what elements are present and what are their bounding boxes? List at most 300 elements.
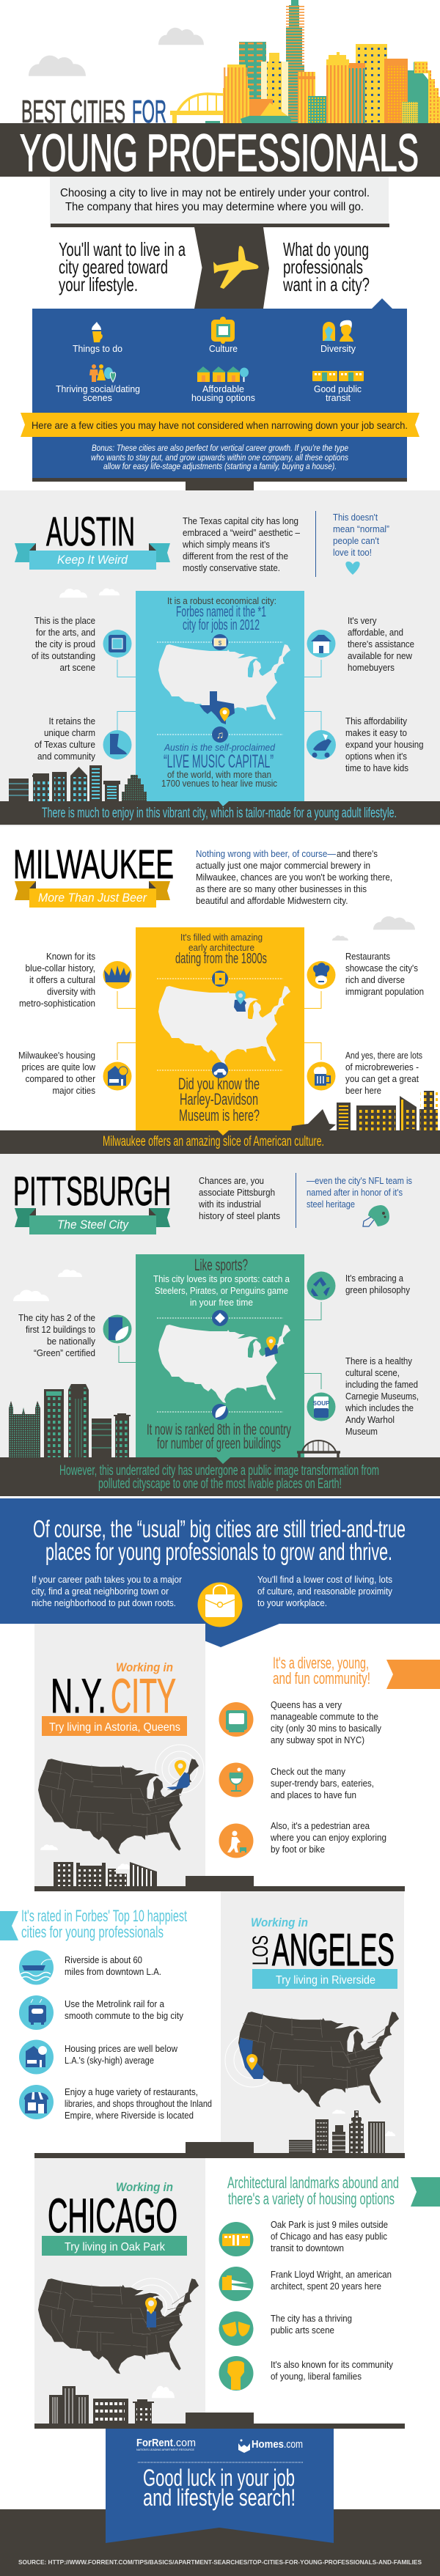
text: pittsburgh intro: associate Pittsburgh [199,1188,275,1198]
left item: housing prices [18,1050,132,1096]
center panel: pittsburgh facts [136,1254,304,1457]
text: what do young professionals want: What do young [283,238,369,260]
icon: subway [219,1702,254,1737]
connectors [117,660,321,731]
panel: milwaukee [0,841,440,2576]
center panel: milwaukee facts: It's filled with amazing [180,932,263,943]
la item: housing [19,2039,178,2075]
base bar: chicago [34,2413,405,2429]
right item: kids: time to have kids [345,763,408,773]
right item: microbreweries: And yes, there are lots [345,1050,422,1061]
icon: dollar bill [212,634,228,650]
text: austin intro [182,516,300,573]
map: usa with texas [158,644,290,724]
nyc item: bars: super-trendy bars, eateries, [271,1778,374,1789]
heading: forbes happiest: cities for young professionals [21,1923,164,1941]
left item: housing prices: major cities [53,1086,95,1096]
center panel: milwaukee facts: Did you know the [178,1075,260,1093]
nyc item: pedestrian: where you can enjoy exploring [270,1833,386,1843]
skyline: nyc [54,1862,157,1886]
right item: restaurants: immigrant population [345,987,424,997]
text: austin intro: mostly conservative state. [183,563,280,573]
callout: nfl team: named after in honor of it's [307,1188,403,1198]
left item: green buildings: “Green” certified [34,1348,95,1358]
text: austin intro: different from the rest of the [183,551,288,562]
right item: affordable: homebuyers [348,663,395,673]
heading: architectural landmarks [227,2174,399,2208]
left item: blue collar: Known for its [46,952,95,962]
la item: restaurants: libraries, and shops throughout the Inland [65,2099,212,2109]
center panel: pittsburgh facts: Like sports? [194,1256,248,1274]
icon: leaf [212,1404,228,1420]
left item: blue collar [19,952,132,1009]
icon: green building [103,1315,132,1343]
text: milwaukee intro: Nothing wrong with beer, of course— [196,849,336,859]
icon: houses [197,367,249,382]
icon: football helmet [363,1205,389,1226]
center panel: pittsburgh facts: It now is ranked 8th in the country [147,1421,291,1438]
logo: forrent: ForRent [136,2437,173,2449]
icon: stroller [307,730,336,759]
center panel: pittsburgh facts: in your free time [190,1298,253,1308]
icon: soup can: SOUP [313,1400,330,1407]
callout: normal people: mean “normal” [333,524,389,534]
right item: microbreweries: of microbreweries - [345,1062,419,1072]
right item: kids: This affordability [345,716,408,726]
icon: briefcase [198,1582,242,1627]
flag: nyc [386,1660,440,1689]
panel: usual big cities [0,1498,440,1647]
panel: chicago [34,2158,205,2424]
icon: ice cream cup [92,322,103,342]
right item: kids: options when it's [345,751,407,762]
icon: music note [212,726,228,743]
nyc item: bars [219,1762,374,1800]
callout: normal people: This doesn't [333,512,378,523]
center panel: milwaukee facts: early architecture [188,942,254,953]
skyline: los angeles [289,2111,385,2153]
chicago item: oak park: transit to downtown [271,2243,344,2253]
banner: pittsburgh summary [0,1457,440,1496]
nyc item: commute: Queens has a very [271,1700,342,1710]
center panel: pittsburgh facts: Steelers, Pirates, or Penguins game [155,1286,288,1296]
text: what do young professionals want: want in a city? [282,273,370,295]
label: thriving social scenes [56,383,140,403]
center panel: pittsburgh facts: for number of green buildings [157,1435,281,1452]
bridge [297,1440,340,1457]
text: austin intro: embraced a “weird” aesthetic – [183,528,300,538]
heading: diverse young fun: It's a diverse, young, [273,1654,369,1672]
map: usa with illinois [38,2278,199,2374]
left item: blue collar: diversity with [47,987,95,997]
panel: good luck [106,2429,334,2543]
text: lower cost: to your workplace. [257,1598,327,1608]
center panel: milwaukee facts [136,927,304,1130]
title: best cities for: BEST CITIES [21,94,125,130]
left item: green buildings: first 12 buildings to [26,1325,95,1335]
icon: architecture [212,971,228,987]
left item: texas culture: of Texas culture [34,740,95,750]
right item: restaurants: rich and diverse [345,975,405,985]
icon: framed art [103,630,132,658]
right item: kids [307,716,424,773]
label: culture: Culture [209,343,238,354]
right item: cultural scene: cultural scene, [345,1368,400,1378]
right item: cultural scene: Museum [345,1427,378,1437]
text: career path [32,1575,182,1608]
left item: texas culture: It retains the [48,716,95,726]
box: try living in riverside [252,1969,397,1989]
icon: walker with dog [219,1824,254,1858]
clouds [332,2110,395,2136]
icon: heart [345,562,360,575]
heading: forbes happiest [21,1907,187,1941]
label: things to do: Things to do [73,343,122,354]
flag: chicago [411,2177,440,2207]
right item: cultural scene: Carnegie Museums, [345,1391,419,1402]
icon: chef [307,961,336,989]
intro box: Choosing a city to live in may not be entirely under your control. [60,187,370,199]
label: diversity: Diversity [320,343,356,354]
icon: boat [19,1950,54,1985]
right item: affordable: affordable, and [348,628,403,638]
nyc item: commute: city (only 30 mins to basically [271,1723,382,1734]
right item: cultural scene: including the famed [345,1380,418,1390]
intro box: The company that hires you may determine where you will go. [65,201,364,213]
label: working in: Working in [116,2180,173,2194]
clouds [13,1270,82,1301]
text: pittsburgh intro: Chances are, you [199,1176,264,1186]
chicago item: liberal families [219,2356,394,2391]
skyline: header [170,0,440,125]
label: thriving social scenes: scenes [83,392,112,403]
box: try living in astoria [42,1716,187,1736]
text: austin intro: The Texas capital city has long [183,516,298,526]
text: milwaukee intro: Milwaukee, chances are you won't be working there, [196,872,392,883]
label: affordable housing: Affordable [202,383,244,394]
icon: train [219,2222,254,2256]
callout: normal people [333,512,389,558]
icon: airplane [213,246,258,289]
text: what do young professionals want: professionals [283,256,363,278]
right item: cultural scene: Andy Warhol [345,1415,395,1425]
heading: ny city: N.Y. [51,1668,106,1723]
icon: recycle [307,1271,336,1300]
icon: cowboy boot [103,730,132,759]
nyc item: commute: any subway spot in NYC) [271,1735,364,1745]
text: career path: If your career path takes you to a major [32,1575,182,1585]
left item: green buildings [18,1313,132,1358]
box: try living in oak park [42,2236,187,2256]
center panel: milwaukee facts: Harley-Davidson [180,1090,258,1108]
right item: green philosophy: green philosophy [345,1285,411,1295]
pin: riverside [246,2054,257,2070]
heading: chicago: CHICAGO [48,2188,177,2242]
right item: restaurants [307,952,424,997]
nyc item: commute: manageable commute to the [271,1712,378,1722]
icon: glass [219,1762,254,1797]
text: bonus: allow for easy life-stage adjustments (starting a family, buying a house). [103,463,337,471]
text: lower cost: of culture, and reasonable proximity [257,1586,393,1597]
callout: nfl team: —even the city's NFL team is [307,1176,412,1186]
pin: new york [175,1760,186,1776]
text: career path: niche neighborhood to put down roots. [32,1598,176,1608]
text: pittsburgh intro: with its industrial [198,1199,261,1210]
left item: arts: of its outstanding [32,651,95,661]
heading: milwaukee: MILWAUKEE [13,841,174,887]
road [194,227,269,309]
callout: nfl team [307,1176,412,1210]
center panel: austin facts: city for jobs in 2012 [183,617,260,633]
heading: diverse young fun: and fun community! [273,1669,370,1688]
left item: arts: the city is proud [35,639,95,649]
text: lower cost [257,1575,393,1608]
icon: beer mug [307,1061,336,1091]
ribbon: the steel city [15,1208,170,1234]
text: lifestyle question: city geared toward [59,256,168,278]
center panel: milwaukee facts: dating from the 1800s [175,951,267,967]
banner: austin summary [0,801,440,825]
panel: what young professionals want [21,298,419,490]
icon: train [312,371,364,381]
closing message: and lifestyle search! [143,2484,296,2511]
label: working in: Working in [251,1916,308,1929]
map: usa with california [238,2012,399,2107]
nyc item: bars: Check out the many [271,1767,346,1777]
icon: tram [19,1995,54,2030]
text: lifestyle question: You'll want to live in a [59,238,186,260]
intro box [50,177,389,227]
la item: restaurants: Enjoy a huge variety of restaurants, [65,2087,198,2097]
banner: milwaukee summary [0,1130,440,1154]
ribbon: the steel city: The Steel City [57,1218,129,1232]
chicago item: oak park: Oak Park is just 9 miles outside [271,2220,388,2230]
map: usa with new york [38,1759,199,1854]
callout: nfl team: steel heritage [307,1199,355,1210]
center panel: milwaukee facts: Museum is here? [179,1106,260,1125]
icon: house price [19,2039,54,2075]
chicago item: liberal families: of young, liberal families [271,2371,362,2382]
label: thriving social scenes: Thriving social/dating [56,383,140,394]
left item: texas culture: and community [37,751,96,762]
panel: pittsburgh [0,1154,440,2576]
heading: forbes happiest: It's rated in Forbes' Top 10 happiest [21,1907,187,1925]
label: affordable housing: housing options [191,392,255,403]
text: bonus: Bonus: These cities are also perfect for vertical career growth. If you're the type [92,444,348,453]
callout: normal people: love it too! [333,548,372,558]
closing message: Good luck in your job [143,2465,295,2491]
icon: theater masks [219,2311,254,2346]
la item: metrolink [19,1995,184,2030]
box: try living in oak park: Try living in Oak Park [65,2241,166,2253]
icon: music note: ♫ [216,729,224,740]
nyc item: pedestrian: by foot or bike [271,1844,325,1855]
skyline: pittsburgh [9,1384,131,1457]
right item: kids: expand your housing [345,740,424,750]
right item: cultural scene: There is a healthy [345,1356,413,1366]
right item: restaurants: Restaurants [345,952,390,962]
nyc item: commute [219,1700,382,1745]
label: public transit [314,383,362,403]
left item: arts: This is the place [34,616,95,626]
clouds [59,589,120,597]
center panel: austin facts: It is a robust economical city: [167,595,276,606]
center panel: austin facts [136,591,304,801]
panel: los angeles [221,1891,404,2153]
closing message [143,2465,296,2511]
right item: microbreweries: you can get a great [345,1074,419,1084]
text: milwaukee intro [196,849,392,906]
chicago item: frank lloyd wright: Frank Lloyd Wright, an american [271,2270,392,2280]
skyline: milwaukee [291,1091,438,1130]
text: milwaukee intro: actually just one major commercial brewery in [196,861,370,871]
right item: restaurants: showcase the city's [345,963,418,974]
panel: nyc [34,1624,205,1886]
text: lower cost: You'll find a lower cost of living, lots [257,1575,392,1585]
left item: housing prices: compared to other [25,1074,95,1084]
text: austin intro: which simply means it's [182,540,270,550]
center panel: austin facts: Forbes named it the *1 [176,604,266,620]
icon: diverse faces [323,320,353,342]
icon: raised fist [219,2356,254,2391]
icon: house price [103,1061,132,1091]
banner: milwaukee summary: Milwaukee offers an amazing slice of American culture. [103,1134,324,1149]
la item: restaurants: Empire, where Riverside is located [65,2111,194,2121]
base bar: nyc [34,1876,405,1891]
la item: housing: Housing prices are well below [65,2044,178,2054]
left item: texas culture [34,716,132,762]
nyc item: pedestrian [219,1821,386,1858]
right item: cultural scene [307,1356,419,1437]
left item: arts: art scene [60,663,95,673]
heading: austin: AUSTIN [46,508,135,554]
label: affordable housing [191,383,255,403]
flag: los angeles [0,1911,18,1940]
text: career path: city, find a great neighboring town or [32,1586,169,1597]
clouds [40,1844,132,1869]
callout: normal people: people can't [333,536,379,546]
ribbon: more than just beer [15,881,170,908]
text: milwaukee intro: beautiful and affordable Midwestern city. [196,896,348,906]
logo: forrent [136,2437,196,2451]
right item: microbreweries [307,1050,422,1096]
right item: affordable [307,616,414,673]
base bar: los angeles [34,2142,405,2158]
center panel: austin facts: “LIVE MUSIC CAPITAL” [164,751,274,772]
logo: homes: Homes [252,2438,284,2451]
left item: blue collar: it offers a cultural [29,975,95,985]
text: pittsburgh intro: history of steel plants [199,1211,280,1221]
center panel: austin facts: of the world, with more than [167,770,271,780]
left item: arts [32,616,132,673]
right item: microbreweries: beer here [345,1086,381,1096]
right item: affordable: there's assistance [348,639,414,649]
source line: SOURCE: HTTP://WWW.FORRENT.COM/TIPS/BASICS/APARTMENT-SEARCHES/TOP-CITIES-FOR-YOUNG-PROFESSIONALS-AND-FAMILIES [18,2558,422,2566]
icon: crown [103,961,132,989]
logo: homes: .com [284,2438,303,2451]
clouds [332,916,415,941]
right item: affordable: available for new [348,651,413,661]
map: usa with wisconsin [158,986,290,1064]
left item: housing prices: Milwaukee's housing [18,1050,95,1061]
left item: arts: for the arts, and [36,628,95,638]
icon: couple with heart [89,364,116,382]
la item: metrolink: smooth commute to the big city [65,2011,184,2021]
chicago item: liberal families: It's also known for its community [271,2360,394,2370]
ribbon: more than just beer: More Than Just Beer [38,891,147,905]
text: milwaukee intro: as there are so many other businesses in this [196,884,367,894]
pin: oak park [145,2297,157,2314]
label: public transit: transit [326,392,351,403]
footer background [0,2509,440,2576]
icon: prairie house [219,2267,254,2301]
label: public transit: Good public [314,383,362,394]
logo: forrent: .com [173,2437,196,2449]
chicago item: public arts [219,2311,352,2346]
text: what do young professionals want [282,238,370,295]
heading: ny city: CITY [111,1668,176,1723]
center panel: austin facts: 1700 venues to hear live music [161,779,277,789]
logo: forrent: NATION'S LEADING APARTMENT RESOURCE [136,2448,195,2451]
text: bonus [91,444,348,471]
la item: distance [19,1950,161,1985]
left item: green buildings: be nationally [47,1336,96,1347]
right item: affordable: It's very [348,616,377,626]
la item: metrolink: Use the Metrolink rail for a [65,1999,164,2009]
title: best cities for: FOR [132,94,166,130]
icon: motorcycle [212,1062,228,1078]
icon: soup can [307,1393,336,1421]
icon: sports ball [212,1310,228,1326]
logo: homes [238,2438,303,2453]
icon: picture frame [211,317,235,344]
icon: storefront [19,2085,54,2119]
chicago item: public arts: The city has a thriving [271,2314,352,2324]
la item: distance: Riverside is about 60 [65,1955,142,1965]
map: usa with pennsylvania [158,1325,290,1403]
box: try living in riverside: Try living in Riverside [276,1974,375,1987]
chicago item: public arts: public arts scene [271,2325,334,2336]
cloud: header right [158,28,204,45]
right item: green philosophy [307,1271,411,1300]
chicago item: frank lloyd wright: architect, spent 20 years here [271,2281,381,2292]
ribbon: keep it weird [15,543,170,570]
chicago item: frank lloyd wright [219,2267,392,2301]
right item: green philosophy: It's embracing a [345,1273,403,1284]
skyline: austin [9,765,147,801]
center panel: pittsburgh facts: This city loves its pro sports: catch a [153,1274,290,1284]
text: milwaukee intro: and there's [337,849,378,859]
right item: kids: makes it easy to [345,728,407,738]
nyc item: bars: and places to have fun [271,1790,356,1800]
la item: housing: L.A.'s (sky-high) average [65,2056,154,2066]
icon: house [307,630,336,658]
nyc item: pedestrian: Also, it's a pedestrian area [271,1821,370,1831]
left item: housing prices: prices are quite low [22,1062,96,1072]
center panel: austin facts: Austin is the self-proclaimed [164,742,276,753]
heading: los: LOS [249,1935,273,1965]
text: lifestyle question [59,238,186,295]
left item: texas culture: unique charm [44,728,95,738]
ribbon: few cities [21,413,419,437]
la item: distance: miles from downtown L.A. [65,1967,161,1977]
ribbon: few cities: Here are a few cities you may have not considered when narrowing down your job search. [32,419,408,431]
chicago item: oak park [219,2220,388,2256]
text: pittsburgh intro [198,1176,280,1221]
right item: cultural scene: which includes the [345,1403,414,1413]
cloud [152,2386,175,2398]
left item: blue collar: blue-collar history, [25,963,95,974]
